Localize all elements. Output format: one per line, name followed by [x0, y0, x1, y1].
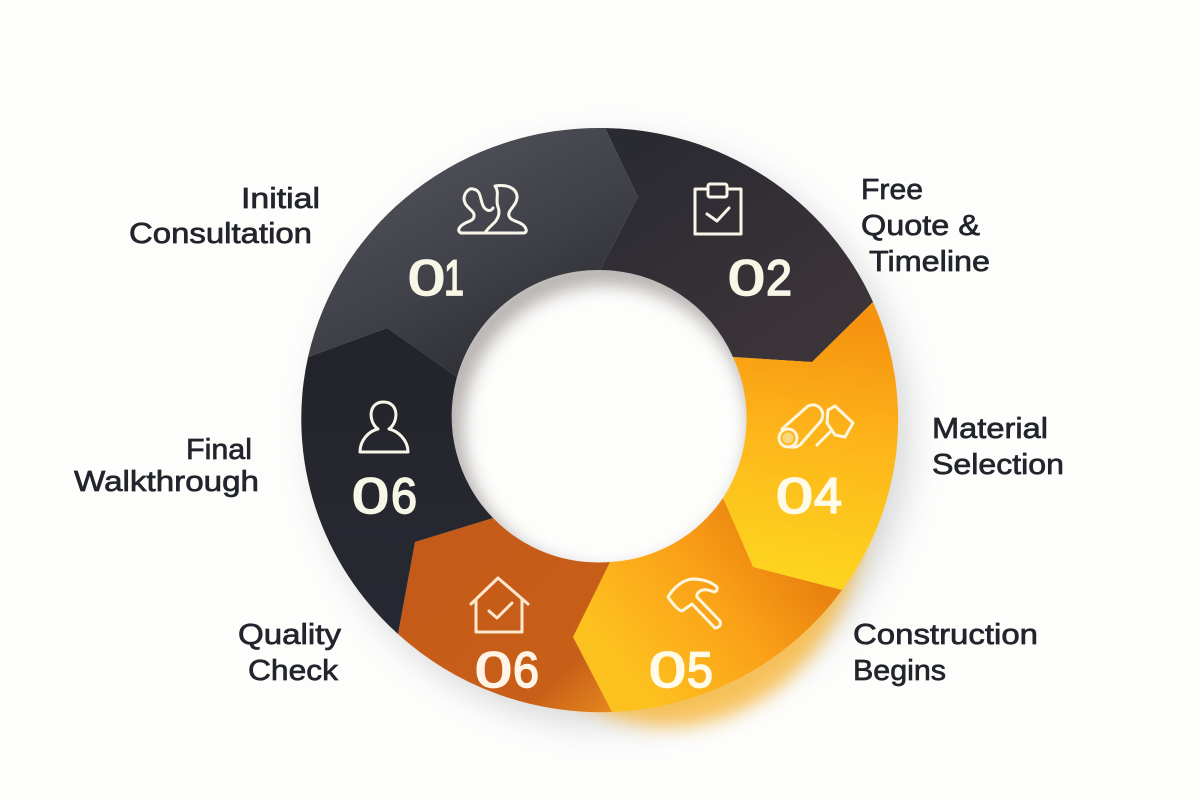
- label: Construction Begins: Construction: [853, 619, 1038, 651]
- label: Free Quote & Timeline: [861, 174, 990, 278]
- segment 02: [600, 128, 873, 362]
- number 06: 0: [352, 468, 389, 524]
- number 06: 6: [513, 642, 539, 698]
- label: Free Quote & Timeline: Free: [861, 174, 923, 206]
- number 06: 6: [391, 468, 417, 524]
- ring shadow: [314, 142, 910, 726]
- label: Construction Begins: [853, 619, 1038, 687]
- segment 05: [573, 498, 842, 712]
- label: Final Walkthrough: Final: [186, 434, 252, 466]
- icon: clipboard with check: [695, 184, 741, 234]
- number 01: 1: [444, 250, 464, 306]
- label: Free Quote & Timeline: Quote &: [861, 210, 980, 242]
- label: Initial Consultation: [129, 183, 320, 250]
- number 05: 0: [649, 642, 686, 698]
- number 06: 0: [475, 642, 512, 698]
- label: Quality Check: [238, 619, 342, 687]
- centre hole: [452, 264, 747, 568]
- number 01: 0: [408, 250, 445, 306]
- segment 01: [308, 128, 638, 377]
- label: Free Quote & Timeline: Timeline: [869, 246, 990, 278]
- label: Initial Consultation: Initial: [241, 183, 320, 215]
- label: Material Selection: Selection: [932, 449, 1064, 481]
- label: Initial Consultation: Consultation: [129, 218, 312, 250]
- label: Final Walkthrough: [74, 434, 259, 498]
- label: Quality Check: Check: [248, 655, 339, 687]
- label: Construction Begins: Begins: [853, 655, 946, 687]
- number 05: 5: [687, 642, 713, 698]
- icon: roller and brush: [779, 405, 853, 447]
- number 02: 0: [728, 250, 765, 306]
- label: Material Selection: [932, 413, 1064, 481]
- number 04: 0: [776, 468, 813, 524]
- number 02: 2: [766, 250, 792, 306]
- icon: house with check: [471, 578, 528, 632]
- icon: person: [360, 402, 408, 452]
- segment 06 dark: [301, 328, 493, 634]
- label: Material Selection: Material: [932, 413, 1048, 445]
- label: Final Walkthrough: Walkthrough: [74, 466, 259, 498]
- label: Quality Check: Quality: [238, 619, 342, 651]
- segment 06 orange: [398, 518, 612, 712]
- number 04: 4: [814, 468, 842, 524]
- icon: two people: [459, 185, 526, 233]
- icon: hammer: [668, 579, 720, 628]
- segment 04: [723, 302, 898, 590]
